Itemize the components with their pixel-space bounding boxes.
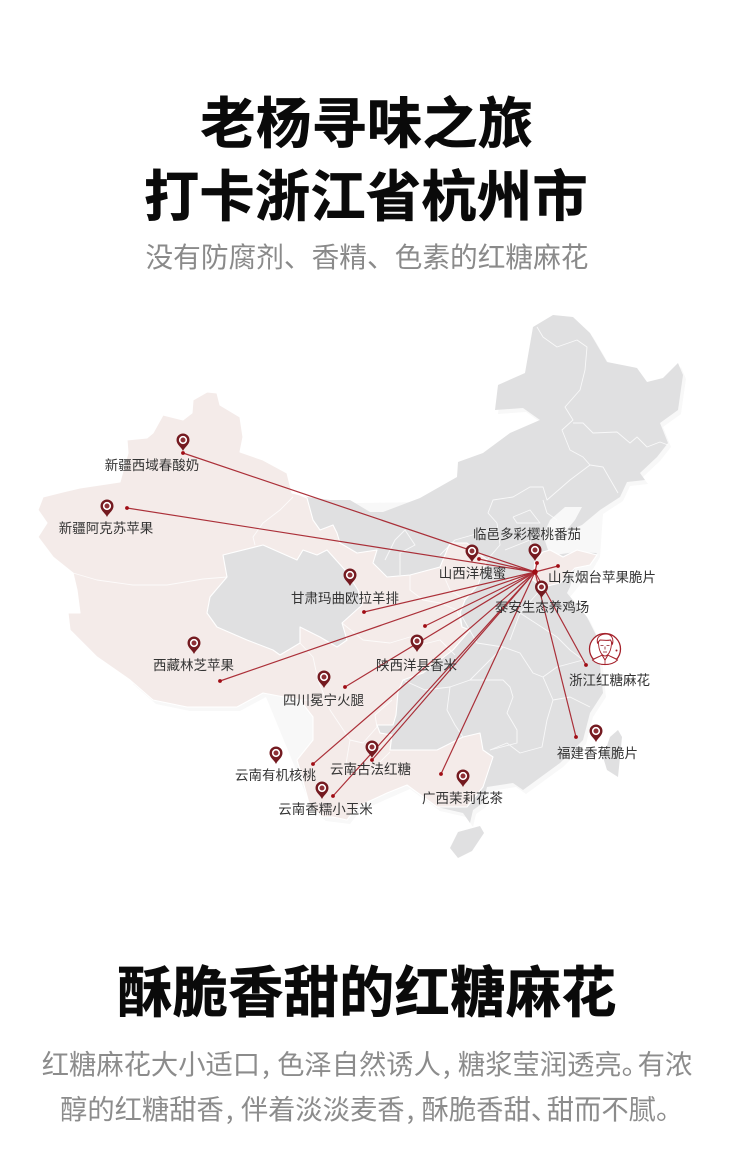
section heading: 酥脆香甜的红糖麻花 (117, 962, 617, 1024)
route lines to Hangzhou hub (127, 453, 586, 796)
location: 新疆阿克苏苹果: 新疆阿克苏苹果 (59, 521, 154, 536)
Qinghai in grey (207, 545, 362, 655)
location: 新疆阿克苏苹果 (59, 500, 154, 536)
location: 浙江红糖麻花: 浙江红糖麻花 (569, 673, 650, 688)
location: 云南有机核桃 (235, 746, 316, 783)
location: 临邑多彩樱桃番茄: 临邑多彩樱桃番茄 (473, 526, 581, 542)
location: 云南香糯小玉米: 云南香糯小玉米 (278, 802, 373, 817)
body text line 2: 、 (531, 1087, 558, 1127)
body text line 2: 醇的红糖甜香 伴着淡淡麦香 酥脆香甜 甜而不腻 (60, 1087, 656, 1127)
location: 西藏林芝苹果 (153, 636, 234, 673)
body text line 1: , (443, 1042, 450, 1082)
route end dots (125, 451, 588, 798)
subtitle: 没有防腐剂、香精、色素的红糖麻花 (145, 242, 588, 273)
location: 山东烟台苹果脆片: 山东烟台苹果脆片 (548, 569, 656, 585)
location: 福建香蕉脆片: 福建香蕉脆片 (557, 745, 638, 761)
location: 山西洋槐蜜: 山西洋槐蜜 (439, 566, 506, 581)
location: 福建香蕉脆片 (557, 724, 638, 761)
base map: China silhouette (38, 315, 686, 858)
province borders (73, 327, 668, 772)
title line 1: 老杨寻味之旅 (200, 93, 534, 155)
body text line 2: 。 (656, 1087, 683, 1127)
location: 四川冕宁火腿: 四川冕宁火腿 (283, 692, 364, 708)
body text line 1: , (262, 1042, 270, 1082)
location: 陕西洋县香米 (376, 634, 457, 673)
location: 甘肃玛曲欧拉羊排 (291, 568, 399, 606)
location: 广西茉莉花茶: 广西茉莉花茶 (422, 790, 503, 806)
location: 泰安生态养鸡场: 泰安生态养鸡场 (495, 599, 589, 615)
location: 山西洋槐蜜 (439, 544, 506, 581)
location: 四川冕宁火腿 (283, 670, 364, 708)
body text line 1: 。 (622, 1042, 649, 1082)
location: 临邑多彩樱桃番茄 (473, 526, 581, 561)
location: 广西茉莉花茶 (422, 770, 503, 806)
body text line 2: , (407, 1087, 414, 1127)
location: 新疆西域春酸奶 (105, 434, 199, 473)
location: 泰安生态养鸡场 (495, 580, 589, 615)
icon: portrait of Lao Yang (590, 634, 620, 664)
location: 云南古法红糖 (330, 740, 411, 777)
location: 云南香糯小玉米 (278, 782, 373, 817)
location: 甘肃玛曲欧拉羊排: 甘肃玛曲欧拉羊排 (291, 591, 399, 606)
body text line 2: , (226, 1087, 233, 1127)
title line 2: 打卡浙江省杭州市 (144, 166, 588, 228)
location: 陕西洋县香米: 陕西洋县香米 (376, 658, 457, 673)
location: 云南有机核桃: 云南有机核桃 (235, 768, 316, 783)
location: 云南古法红糖: 云南古法红糖 (330, 762, 411, 777)
body text line 1: 红糖麻花大小适口 色泽自然诱人 糖浆莹润透亮 有浓 (42, 1042, 692, 1082)
highlighted provinces in pink (38, 392, 597, 820)
location: 西藏林芝苹果: 西藏林芝苹果 (153, 658, 234, 673)
location: 新疆西域春酸奶: 新疆西域春酸奶 (105, 458, 199, 473)
